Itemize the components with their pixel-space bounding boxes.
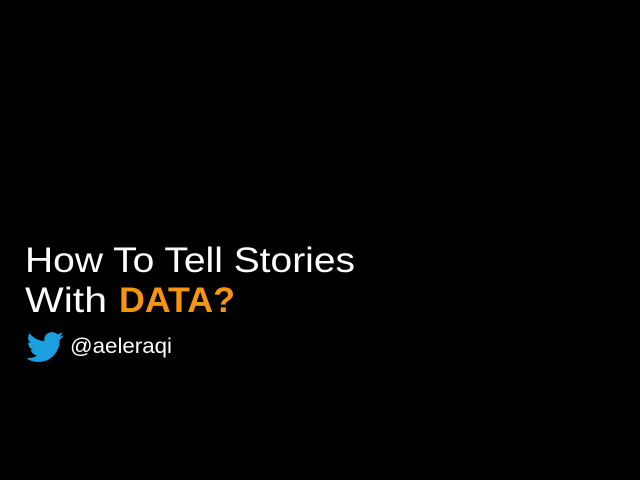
word: With: With [25, 281, 107, 320]
title line 1: How To Tell Stories [25, 241, 355, 280]
title line 2 [25, 281, 235, 320]
word: DATA?: DATA? [119, 281, 235, 320]
icon: twitter bird [27, 332, 63, 362]
twitter handle: @aeleraqi [70, 335, 172, 358]
title [25, 241, 355, 320]
